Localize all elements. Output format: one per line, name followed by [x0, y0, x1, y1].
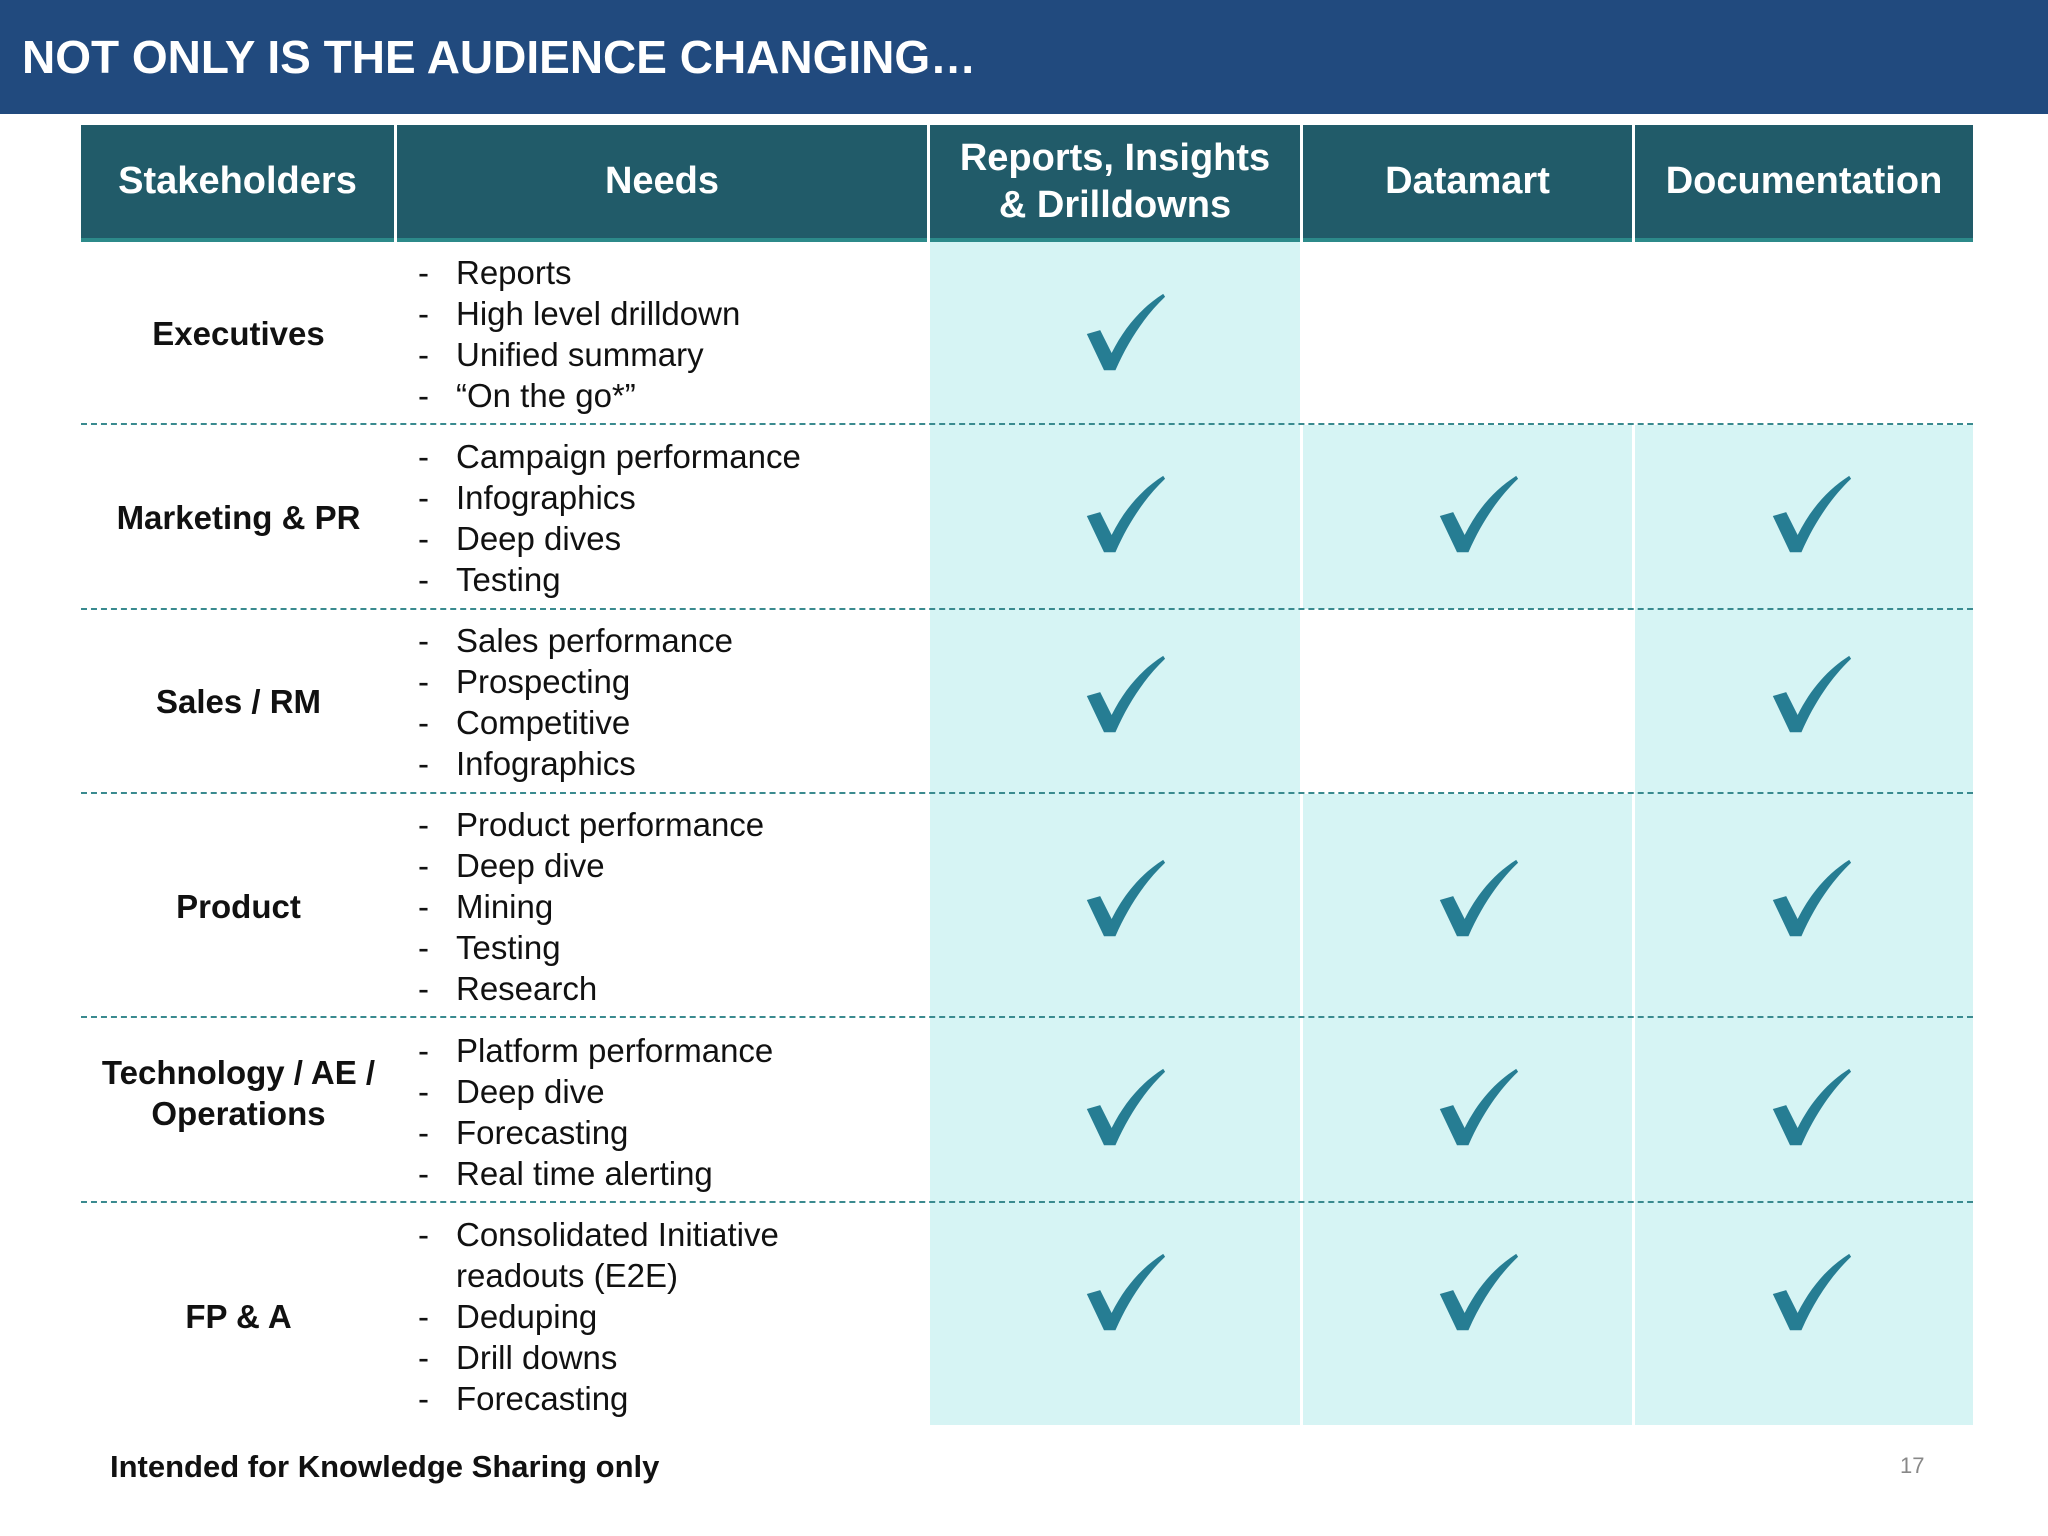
text: Real time alerting	[456, 1155, 713, 1192]
text: Product performance	[456, 806, 764, 843]
text: Platform performance	[456, 1032, 773, 1069]
text: Unified summary	[456, 336, 704, 373]
text: Campaign performance	[456, 438, 801, 475]
text: Mining	[456, 888, 553, 925]
stakeholder labels	[102, 315, 375, 1335]
text: Research	[456, 970, 597, 1007]
text: Forecasting	[456, 1380, 628, 1417]
text: Deduping	[456, 1298, 597, 1335]
text: Deep dives	[456, 520, 621, 557]
text: FP & A	[185, 1298, 292, 1335]
shaded cells	[930, 242, 1973, 1425]
checkmarks	[1086, 294, 1851, 1330]
text: Infographics	[456, 745, 636, 782]
text: readouts (E2E)	[456, 1257, 678, 1294]
text: “On the go*”	[456, 377, 636, 414]
text: Marketing & PR	[117, 499, 360, 536]
header: documentation: Documentation	[1666, 160, 1942, 202]
header: needs	[397, 125, 927, 242]
text: Sales performance	[456, 622, 733, 659]
header: datamart: Datamart	[1385, 160, 1550, 202]
text: Drill downs	[456, 1339, 617, 1376]
text: Deep dive	[456, 847, 605, 884]
text: High level drilldown	[456, 295, 740, 332]
text: Sales / RM	[156, 683, 321, 720]
text: Technology / AE /	[102, 1054, 375, 1091]
text: Testing	[456, 929, 561, 966]
text: Product	[176, 888, 301, 925]
text: Forecasting	[456, 1114, 628, 1151]
text: Operations	[151, 1095, 326, 1132]
text: Testing	[456, 561, 561, 598]
header: reports	[930, 125, 1300, 242]
header: stakeholders: Stakeholders	[118, 160, 357, 202]
header: needs: Needs	[605, 160, 719, 202]
header: reports: & Drilldowns	[999, 184, 1231, 226]
text: Executives	[152, 315, 325, 352]
page number: 17	[1900, 1453, 1924, 1478]
header: reports: Reports, Insights	[960, 136, 1270, 178]
text: Infographics	[456, 479, 636, 516]
header: documentation	[1635, 125, 1973, 242]
title bar	[0, 0, 2048, 114]
text: Deep dive	[456, 1073, 605, 1110]
footer note: Intended for Knowledge Sharing only	[110, 1449, 659, 1484]
text: Reports	[456, 254, 572, 291]
title bar: NOT ONLY IS THE AUDIENCE CHANGING…	[22, 31, 976, 83]
text: Prospecting	[456, 663, 630, 700]
header: datamart	[1303, 125, 1632, 242]
text: Competitive	[456, 704, 630, 741]
needs lists	[419, 254, 801, 1417]
text: Consolidated Initiative	[456, 1216, 779, 1253]
header: stakeholders	[81, 125, 394, 242]
